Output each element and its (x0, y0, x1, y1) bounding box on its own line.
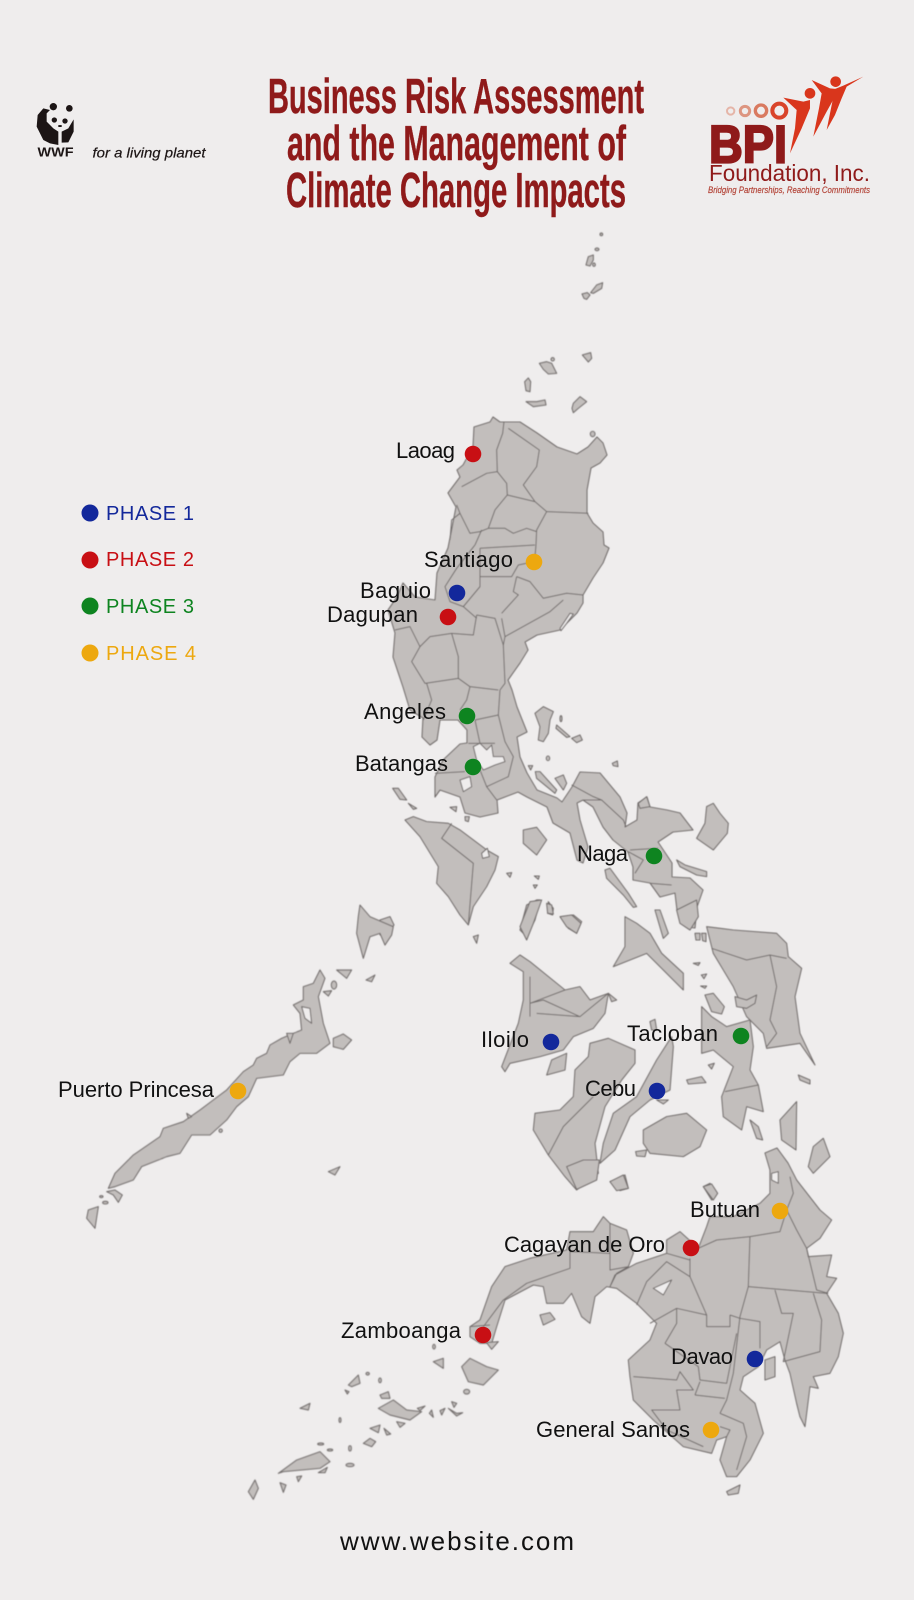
tagline: for a living planet (92, 144, 207, 160)
map of the Philippines (87, 233, 843, 1499)
Masbate (613, 917, 683, 990)
logo: WWF (37, 103, 207, 160)
legend: phase 2: PHASE 2 (106, 549, 194, 571)
Palawan group (87, 905, 393, 1228)
Naga: Naga (577, 841, 629, 866)
Cebu (600, 1037, 673, 1163)
city markers (58, 438, 788, 1442)
icon: panda (37, 103, 74, 145)
title: Business Risk Assessment (268, 70, 644, 124)
Cebu: Cebu (585, 1076, 636, 1101)
Cebu (585, 1076, 665, 1101)
legend: phase 4: PHASE 4 (106, 643, 196, 665)
small Visayan islands (705, 993, 724, 1014)
Butuan: Butuan (690, 1197, 760, 1222)
General Santos: General Santos (536, 1417, 690, 1442)
Iloilo: Iloilo (481, 1027, 529, 1052)
Santiago: Santiago (424, 547, 513, 572)
Baguio (360, 578, 465, 603)
legend (82, 503, 196, 665)
Zamboanga: Zamboanga (341, 1318, 462, 1343)
Laoag (396, 438, 481, 463)
title: and the Management of (287, 117, 626, 171)
Angeles: Angeles (364, 699, 446, 724)
Foundation text: Foundation, Inc. (709, 160, 870, 186)
Sulu archipelago (248, 1344, 498, 1499)
Puerto Princesa: Puerto Princesa (58, 1077, 215, 1102)
Davao (671, 1344, 763, 1369)
legend: phase 3: PHASE 3 (106, 596, 194, 618)
Mindanao province boundaries (470, 1177, 828, 1470)
Iloilo (481, 1027, 559, 1052)
Dagupan: Dagupan (327, 602, 418, 627)
Guimaras (547, 1053, 567, 1075)
WWF wordmark: WWF (38, 145, 74, 160)
Mindanao (470, 1148, 843, 1495)
Luzon and Bicol (388, 417, 703, 928)
Davao: Davao (671, 1344, 733, 1369)
central Luzon province boundaries (395, 600, 672, 885)
Tacloban: Tacloban (627, 1021, 718, 1046)
Visayas (502, 900, 830, 1200)
legend: phase 1: PHASE 1 (106, 503, 194, 525)
BPI wordmark: BPI (709, 116, 787, 174)
northern province boundaries (445, 422, 588, 618)
icon: rings and figures (727, 76, 863, 153)
title: Climate Change Impacts (286, 164, 626, 218)
logo: BPI Foundation (708, 76, 870, 196)
Batangas: Batangas (355, 751, 448, 776)
northern islets (525, 233, 603, 437)
Panay (502, 955, 608, 1072)
Baguio: Baguio (360, 578, 431, 603)
Cagayan de Oro: Cagayan de Oro (504, 1232, 665, 1257)
Negros (533, 1038, 635, 1190)
title (268, 70, 644, 218)
Leyte (702, 1007, 763, 1130)
Samar (707, 927, 815, 1065)
central islands (380, 613, 728, 943)
website footer: www.website.com (339, 1526, 574, 1556)
Naga (577, 841, 662, 866)
Laoag: Laoag (396, 438, 455, 463)
slogan: Bridging Partnerships, Reaching Commitments (708, 185, 870, 196)
Bohol (643, 1113, 707, 1157)
